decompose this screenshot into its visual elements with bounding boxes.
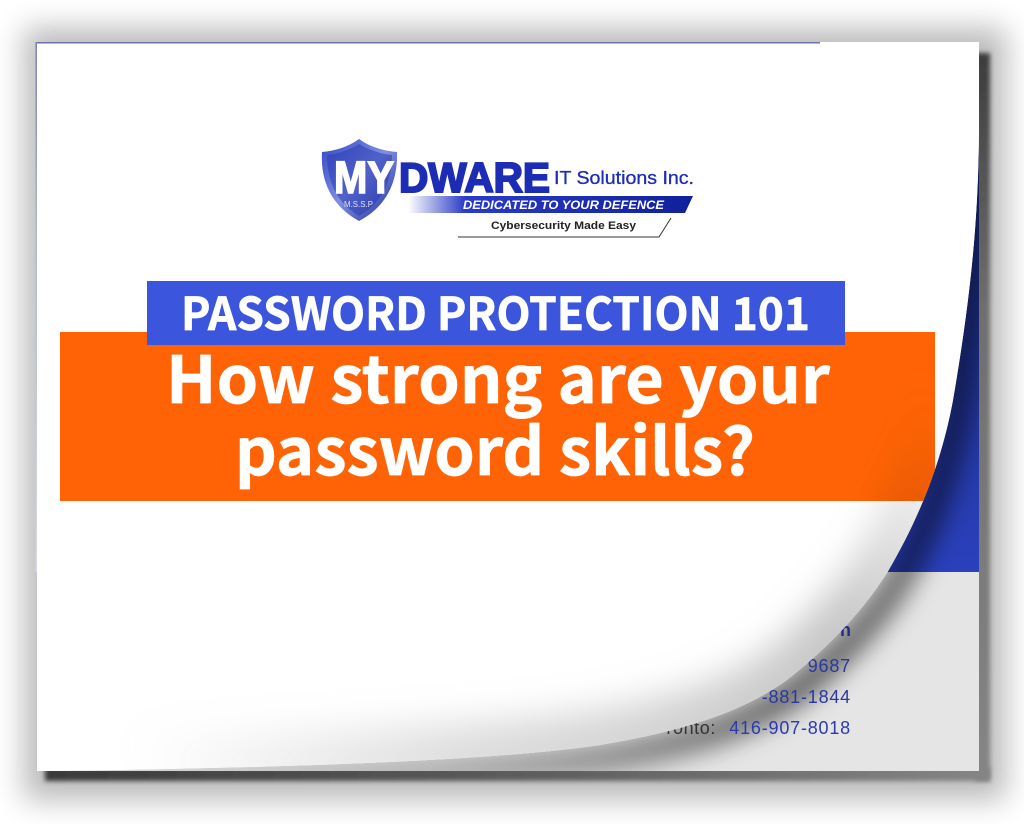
top edge line (37, 42, 820, 44)
contact details: 416-907-8018 (729, 718, 851, 738)
blue heading bar: PASSWORD PROTECTION 101 (181, 278, 810, 343)
slogan: Cybersecurity Made Easy (491, 220, 637, 232)
contact details: ronto: (666, 718, 716, 738)
contact details: 9687 (808, 656, 851, 676)
blue header band behind the curl (888, 147, 979, 572)
revealed back page (48, 144, 979, 771)
logo (322, 139, 694, 237)
contact details: -881-1844 (762, 687, 851, 707)
IT Solutions Inc.: IT Solutions Inc. (554, 168, 694, 188)
left edge line (36, 42, 37, 572)
grey contact footer (37, 572, 979, 771)
orange title banner (60, 332, 935, 501)
company name: DWARE (399, 154, 550, 201)
shadow cast by the curl (37, 120, 979, 776)
tagline band (408, 196, 693, 213)
contact details (666, 620, 851, 738)
shield emblem (322, 139, 397, 221)
main title: password skills? (235, 400, 755, 494)
contact details: n (840, 620, 851, 640)
shield emblem: M.S.S.P (344, 200, 373, 209)
slogan (458, 218, 671, 237)
main title: How strong are your (166, 328, 831, 422)
tagline band: DEDICATED TO YOUR DEFENCE (463, 198, 665, 212)
curl shading (226, 448, 937, 768)
shield emblem: MY (334, 152, 394, 203)
main title (166, 328, 831, 494)
